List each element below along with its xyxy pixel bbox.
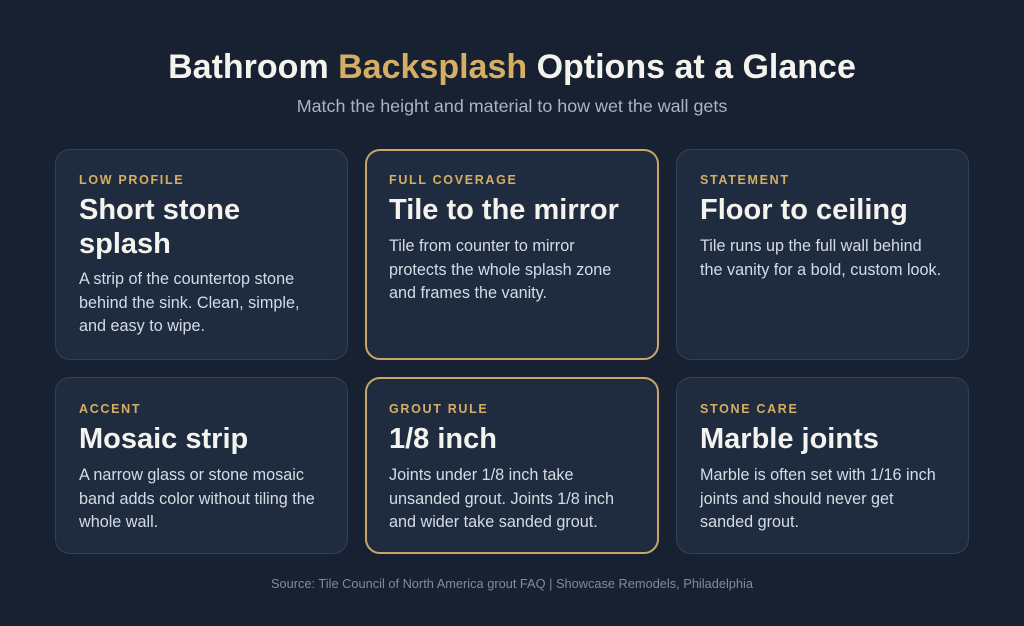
text: floor to ceiling: Tile runs up the full wall behind xyxy=(700,237,922,255)
label: statement: STATEMENT xyxy=(700,173,790,187)
text: floor to ceiling: the vanity for a bold, custom look. xyxy=(700,261,941,279)
text: tile to the mirror: Tile from counter to mirror xyxy=(389,237,575,255)
text: tile to the mirror: and frames the vanity. xyxy=(389,284,547,302)
heading: tile to the mirror: Tile to the mirror xyxy=(389,194,619,226)
text: marble joints: joints and should never get xyxy=(700,490,893,508)
heading: floor to ceiling: Floor to ceiling xyxy=(700,194,908,226)
text: tile to the mirror xyxy=(389,237,611,302)
text: short stone splash: A strip of the countertop stone xyxy=(79,270,294,288)
panel: short stone splash xyxy=(55,149,348,360)
text: mosaic strip: band adds color without tiling the xyxy=(79,490,315,508)
text: marble joints: Marble is often set with 1/16 inch xyxy=(700,466,936,484)
subtitle: Match the height and material to how wet the wall gets xyxy=(297,96,727,116)
text: mosaic strip: A narrow glass or stone mosaic xyxy=(79,466,304,484)
text: short stone splash: behind the sink. Clean, simple, xyxy=(79,294,299,312)
label: accent: ACCENT xyxy=(79,402,141,416)
label: grout rule: GROUT RULE xyxy=(389,402,488,416)
text: short stone splash xyxy=(79,270,299,335)
panel: floor to ceiling xyxy=(676,149,969,360)
heading: mosaic strip: Mosaic strip xyxy=(79,423,248,455)
heading: short stone splash xyxy=(79,194,240,260)
text: grout rule: unsanded grout. Joints 1/8 inch xyxy=(389,490,614,508)
panel: tile to the mirror xyxy=(365,149,659,360)
source line: Source: Tile Council of North America grout FAQ | Showcase Remodels, Philadelphia xyxy=(271,576,753,591)
heading: short stone splash: Short stone xyxy=(79,194,240,226)
label: full coverage: FULL COVERAGE xyxy=(389,173,518,187)
heading: marble joints: Marble joints xyxy=(700,423,879,455)
panel: grout rule xyxy=(365,377,659,554)
text: short stone splash: and easy to wipe. xyxy=(79,317,205,335)
title: Bathroom Backsplash Options at a Glance xyxy=(168,48,856,86)
text: marble joints: sanded grout. xyxy=(700,513,799,531)
text: mosaic strip: whole wall. xyxy=(79,513,158,531)
text: tile to the mirror: protects the whole splash zone xyxy=(389,261,611,279)
panel: marble joints xyxy=(676,377,969,554)
heading: short stone splash: splash xyxy=(79,228,171,260)
text: marble joints xyxy=(700,466,936,531)
text: grout rule: and wider take sanded grout. xyxy=(389,513,598,531)
text: floor to ceiling xyxy=(700,237,941,279)
heading: 1/8 inch: 1/8 inch xyxy=(389,423,497,455)
text: grout rule: Joints under 1/8 inch take xyxy=(389,466,573,484)
panel: mosaic strip xyxy=(55,377,348,554)
label: low profile: LOW PROFILE xyxy=(79,173,184,187)
text: mosaic strip xyxy=(79,466,315,531)
text: grout rule xyxy=(389,466,614,531)
label: stone care: STONE CARE xyxy=(700,402,799,416)
